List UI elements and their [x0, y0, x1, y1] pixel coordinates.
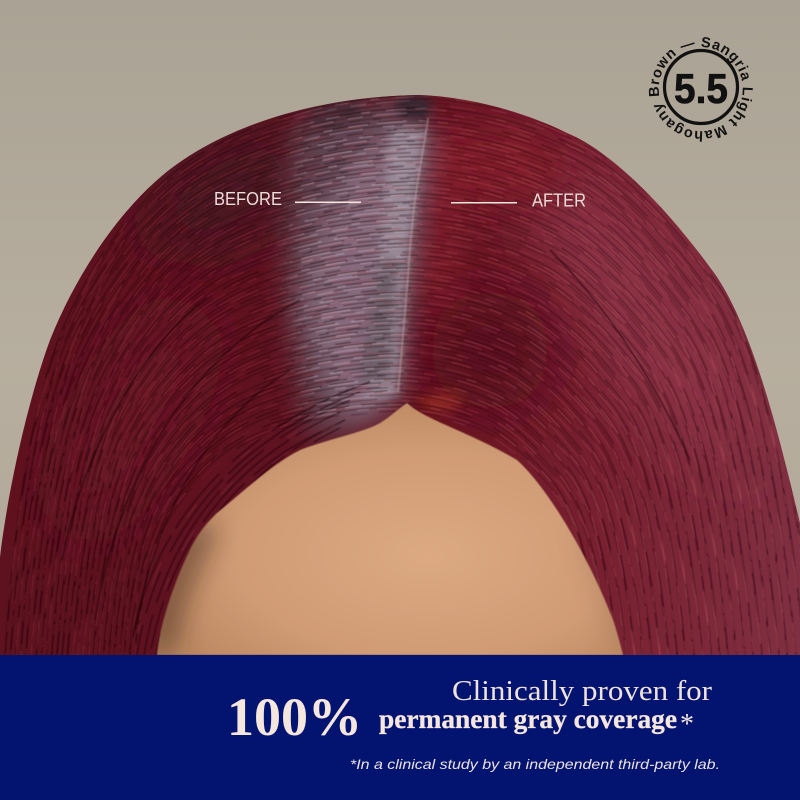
bottom banner [0, 655, 800, 800]
gray roots [287, 96, 432, 440]
shade badge 5.5: 5.5 [674, 65, 728, 112]
hair [0, 95, 800, 655]
footnote: *In a clinical study by an independent third-party lab. [350, 756, 720, 772]
stat 100%: 100% [227, 687, 362, 747]
part line [398, 118, 428, 392]
label: after [451, 190, 586, 210]
hairline strands [130, 382, 370, 655]
claim line 1: Clinically proven for [452, 676, 713, 707]
gray strands [276, 96, 427, 423]
right hair strands [401, 95, 800, 665]
label: after: AFTER [532, 190, 586, 210]
left hair strands [5, 95, 428, 665]
label: before: BEFORE [214, 189, 282, 209]
forehead skin [157, 403, 628, 655]
hair shading [26, 102, 797, 555]
claim line 2: permanent gray coverage [379, 704, 677, 734]
shade badge 5.5: Sangria Light Mahogany Brown — [648, 37, 753, 142]
asterisk: * [680, 709, 694, 740]
main dark strands [62, 250, 690, 630]
